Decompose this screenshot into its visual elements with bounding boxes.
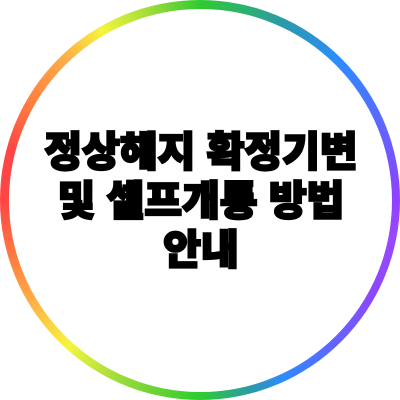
title: 및 셀프개통 방법: [58, 178, 344, 224]
title: 안내: [163, 227, 239, 273]
title: [44, 129, 358, 273]
title: 정상해지 확정기변: [44, 129, 358, 175]
